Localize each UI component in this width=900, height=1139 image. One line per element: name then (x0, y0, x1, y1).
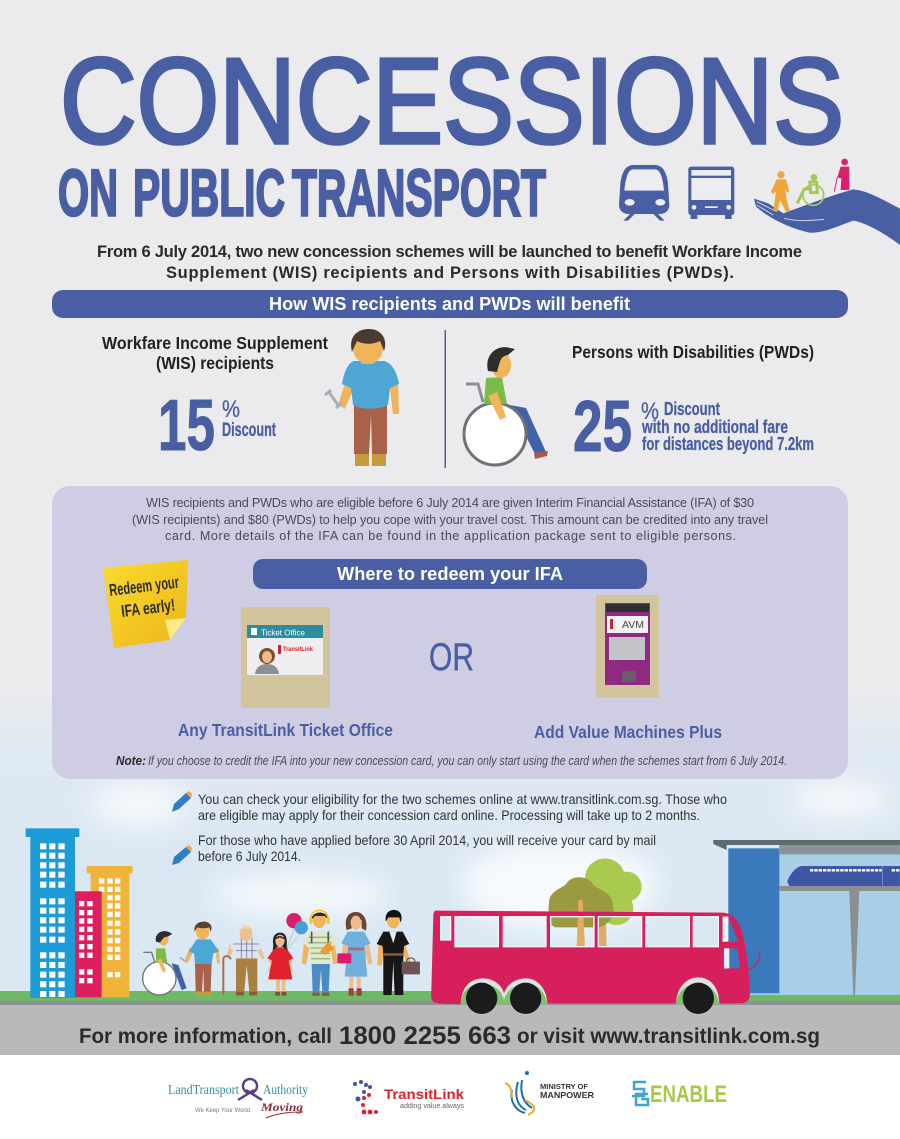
heading: WIS (102, 333, 328, 373)
intro text: Supplement (WIS) recipients and Persons with Disabilities (PWDs). (166, 264, 734, 282)
label: ticket office: Any TransitLink Ticket Office (178, 720, 393, 740)
15 percent discount: 15 (158, 386, 215, 466)
heading: PWDs: Persons with Disabilities (PWDs) (572, 342, 814, 362)
15 percent discount: Discount (222, 420, 276, 441)
panel: WIS recipients (102, 329, 399, 466)
illustration: ticket office: TransitLink (283, 646, 313, 653)
person: girl with balloons (267, 913, 308, 996)
red building (75, 891, 102, 997)
logo: TransitLink: TransitLink (384, 1086, 464, 1102)
logo: TransitLink (353, 1080, 465, 1114)
logo: TransitLink: adding value always (400, 1103, 465, 1110)
logo: Land Transport Authority: Authority (263, 1083, 308, 1098)
intro text: From 6 July 2014, two new concession schemes will be launched to benefit Workfare Income (97, 243, 802, 261)
icon: walking person (771, 171, 790, 212)
person: grandfather with cane (223, 926, 265, 995)
label: add value machines: Add Value Machines Plus (534, 722, 722, 742)
ground and road (0, 991, 900, 1055)
person: man with wrench (180, 922, 220, 996)
sticky note: Redeem your (108, 573, 180, 600)
IFA description: card. More details of the IFA can be found in the application package sent to eligible persons. (165, 529, 736, 543)
subtitle: TRANSPORT (292, 156, 546, 230)
divider (444, 330, 446, 468)
text: card by mail: before 6 July 2014. (198, 849, 301, 864)
IFA description (132, 496, 768, 543)
25 percent discount (573, 387, 814, 467)
sticky note: IFA early! (120, 596, 176, 621)
section bar: how recipients benefit (52, 290, 848, 318)
elevated train (779, 866, 900, 995)
contact line: or visit www.transitlink.com.sg (517, 1024, 820, 1048)
heading: WIS: Workfare Income Supplement (102, 333, 328, 353)
panel: Interim Financial Assistance (52, 486, 848, 779)
heading: WIS: (WIS) recipients (156, 353, 274, 373)
logo: Land Transport Authority: LandTransport (168, 1083, 239, 1098)
subtitle: PUBLIC (133, 156, 285, 230)
header icons: train, bus, hand with people (619, 159, 900, 245)
OR: OR (429, 636, 474, 679)
illustration: add value machine (596, 595, 659, 698)
logo: Ministry of Manpower (505, 1071, 594, 1115)
scene: buildings (26, 828, 420, 998)
25 percent discount: 25 (573, 387, 632, 467)
person: businessman with briefcase (377, 910, 420, 995)
IFA description: WIS recipients and PWDs who are eligible before 6 July 2014 are given Interim Financial Assistance (IFA) of $30 (146, 496, 754, 510)
text: check eligibility (198, 792, 727, 823)
section bar: how recipients benefit: How WIS recipients and PWDs will benefit (269, 294, 630, 314)
25 percent discount: % (641, 398, 659, 425)
yellow building (87, 866, 133, 997)
logo: Land Transport Authority: Moving (260, 1100, 303, 1114)
logo: Ministry of Manpower: MANPOWER (540, 1090, 594, 1100)
illustration: man with wrench (325, 329, 399, 466)
note: If you choose to credit the IFA into your new concession card, you can only start using the card when the schemes start from 6 July 2014. (148, 754, 787, 768)
blue building (26, 828, 79, 998)
illustration: person in wheelchair (464, 347, 548, 465)
illustration: add value machine: AVM (622, 620, 644, 631)
section bar: where to redeem: Where to redeem your IFA (337, 563, 563, 584)
15 percent discount (158, 386, 276, 466)
logo: Land Transport Authority (168, 1079, 308, 1118)
tree (549, 858, 642, 948)
text: card by mail: For those who have applied before 30 April 2014, you will receive your card by mail (198, 833, 656, 848)
icon: pencil (172, 845, 192, 865)
text: check eligibility: You can check your eligibility for the two schemes online at www.transitlink.com.sg. Those who (198, 792, 727, 807)
icon: pencil (172, 791, 192, 812)
illustration: ticket office (241, 607, 330, 708)
contact line (79, 1022, 820, 1050)
station (713, 840, 900, 995)
bus (431, 911, 760, 1004)
icon: bus (688, 167, 734, 219)
illustration: ticket office: Ticket Office (261, 628, 305, 638)
subtitle (58, 156, 546, 230)
25 percent discount: Discount (664, 399, 720, 419)
logo: SG Enable (632, 1081, 727, 1108)
subtitle: ON (58, 156, 118, 230)
25 percent discount: with no additional fare (641, 417, 788, 437)
intro text (97, 243, 802, 282)
logo: Ministry of Manpower: MINISTRY OF (540, 1084, 589, 1091)
panel: PWDs (464, 342, 814, 467)
icon: hand (754, 189, 900, 245)
logo: SG Enable: ENABLE (650, 1081, 727, 1108)
person: woman with handbag (337, 912, 373, 996)
icon: train (619, 165, 669, 221)
person: student with headphones (302, 910, 337, 996)
sticky note (103, 560, 188, 648)
eligibility notes (172, 791, 727, 865)
person: wheelchair user (143, 931, 187, 995)
footer strip (0, 1055, 900, 1139)
icon: person with cane (834, 159, 849, 192)
scene: bus, tree, station (431, 840, 900, 1014)
logo: Land Transport Authority: We Keep Your World (195, 1107, 250, 1114)
contact line: 1800 2255 663 (339, 1022, 511, 1050)
15 percent discount: % (222, 396, 240, 423)
25 percent discount: for distances beyond 7.2km (642, 434, 814, 454)
text: check eligibility: are eligible may apply for their concession card online. Processing will take up to 2 months. (198, 808, 700, 823)
note: Note: (116, 754, 146, 768)
text: card by mail (198, 833, 656, 864)
bus wheels (466, 983, 714, 1014)
IFA description: (WIS recipients) and $80 (PWDs) to help you cope with your travel cost. This amount can be credited into any travel (132, 513, 768, 527)
icon: wheelchair person (797, 174, 824, 205)
section bar: where to redeem (253, 559, 647, 589)
contact line: For more information, call (79, 1024, 332, 1048)
